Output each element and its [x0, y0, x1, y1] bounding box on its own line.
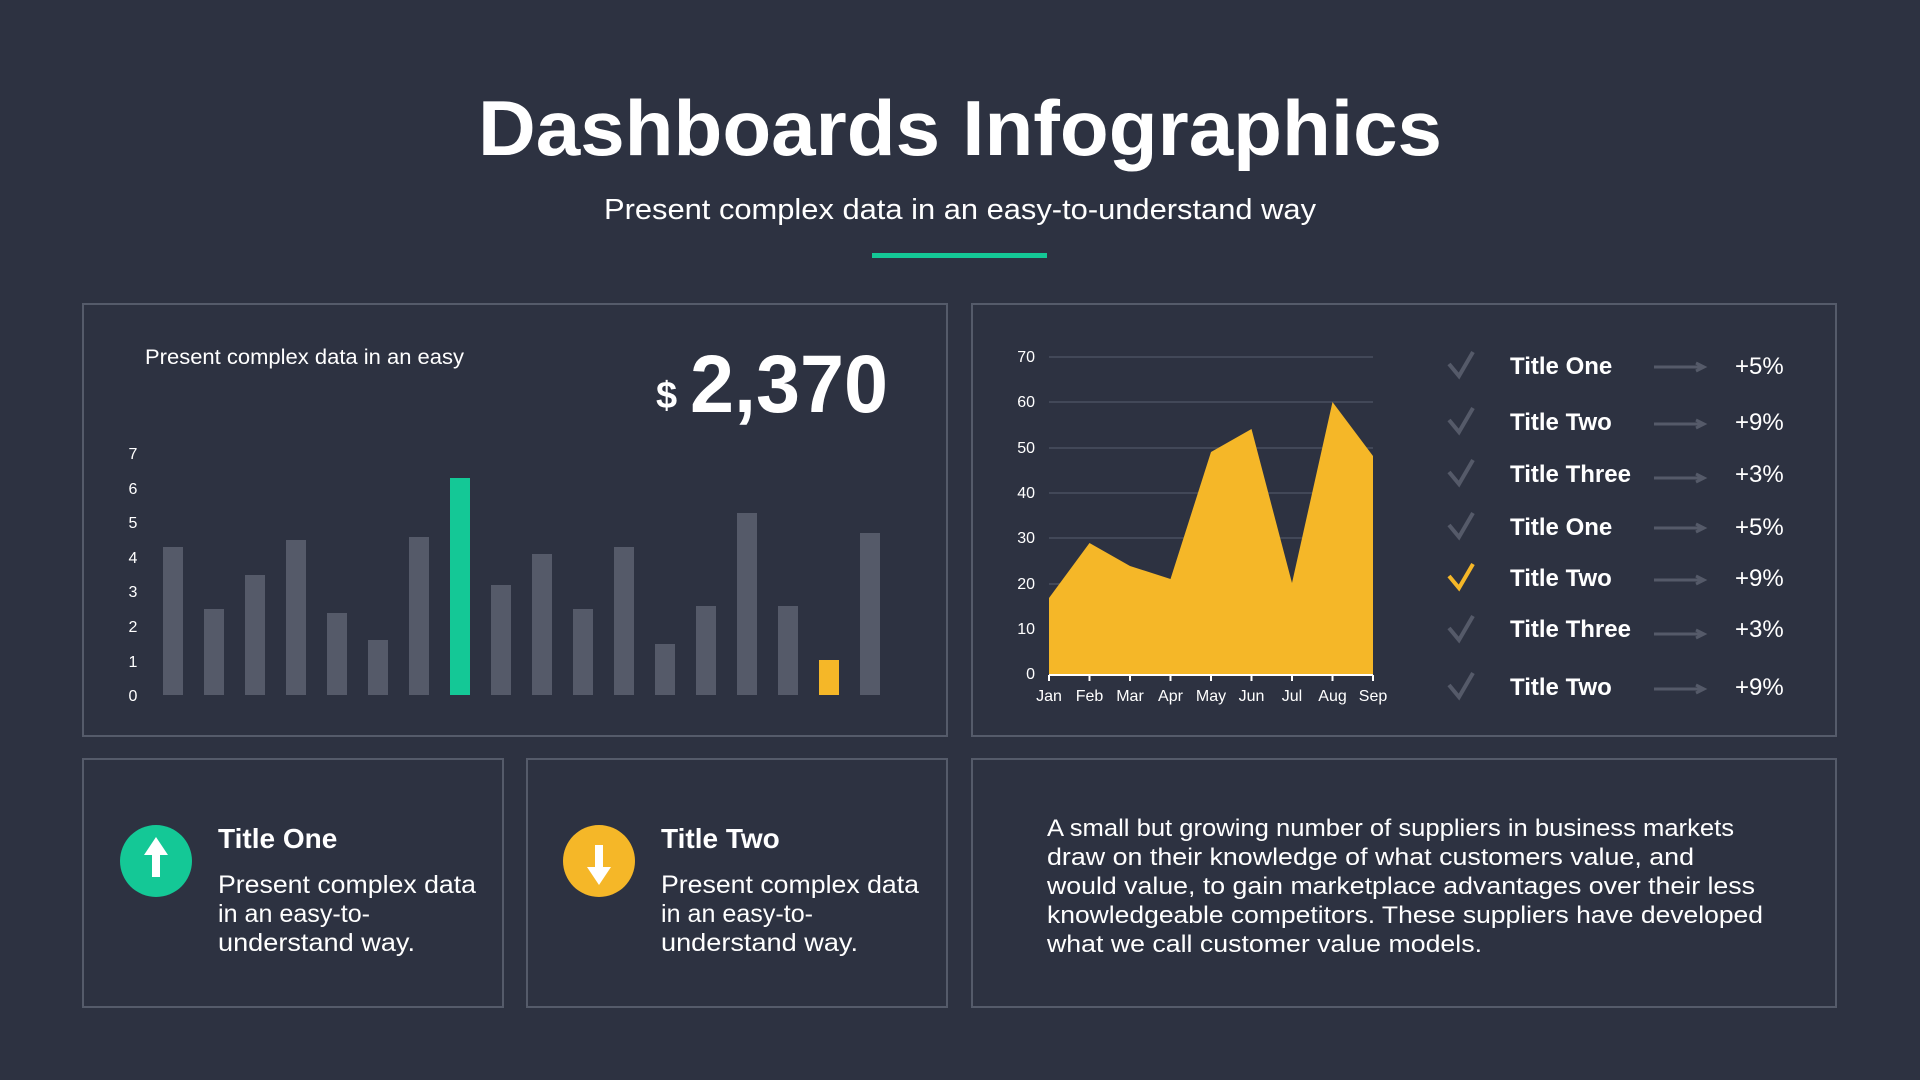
checklist: Title One	[1510, 353, 1612, 380]
panel: description: knowledgeable competitors. These suppliers have developed	[1047, 902, 1763, 929]
panel: title one	[83, 759, 503, 1007]
panel: title one: in an easy-to-	[218, 900, 370, 928]
y axis labels: 5	[129, 515, 138, 532]
panel: title two: in an easy-to-	[661, 900, 813, 928]
checklist: +9%	[1735, 409, 1784, 436]
big number: $	[656, 375, 677, 417]
panel: title one: Present complex data	[218, 871, 476, 899]
y axis labels: 7	[129, 446, 138, 463]
panel: title one: understand way.	[218, 929, 415, 957]
y axis labels: 2	[129, 619, 138, 636]
area chart: 30	[1017, 530, 1035, 547]
bar chart	[163, 478, 880, 695]
checklist	[1449, 352, 1784, 701]
panel: bar chart	[83, 304, 947, 736]
area chart: Apr	[1158, 688, 1184, 705]
area chart: 60	[1017, 394, 1035, 411]
panel: description: what we call customer value models.	[1046, 931, 1482, 958]
checklist: +9%	[1735, 674, 1784, 701]
area chart: 70	[1017, 349, 1035, 366]
area chart: Sep	[1359, 688, 1387, 705]
area chart: May	[1196, 688, 1226, 705]
title underline	[872, 253, 1047, 258]
area chart: 50	[1017, 440, 1035, 457]
checklist: +3%	[1735, 461, 1784, 488]
checklist: +5%	[1735, 514, 1784, 541]
checklist: Title One	[1510, 514, 1612, 541]
checklist: Title Two	[1510, 565, 1612, 592]
subtitle: Present complex data in an easy-to-understand way	[604, 194, 1317, 226]
panel: title one: Title One	[218, 823, 337, 854]
y axis labels	[129, 446, 138, 705]
y axis labels: 6	[129, 481, 138, 498]
title: Dashboards Infographics	[478, 84, 1442, 172]
icon: up arrow	[120, 825, 192, 897]
panel: description: A small but growing number of suppliers in business markets	[1047, 815, 1734, 842]
panel: description	[972, 759, 1836, 1007]
checklist: +3%	[1735, 616, 1784, 643]
checklist: Title Three	[1510, 461, 1631, 488]
area chart: Jan	[1036, 688, 1062, 705]
area chart: 40	[1017, 485, 1035, 502]
big number: 2,370	[690, 339, 888, 430]
area chart: 20	[1017, 576, 1035, 593]
area chart: Feb	[1076, 688, 1103, 705]
panel: title two: Title Two	[661, 823, 780, 854]
panel: title two: Present complex data	[661, 871, 919, 899]
icon: down arrow	[563, 825, 635, 897]
panel: area chart and list	[972, 304, 1836, 736]
area chart: 10	[1017, 621, 1035, 638]
area chart: 0	[1026, 666, 1035, 683]
panel: title two	[527, 759, 947, 1007]
area chart: Jun	[1239, 688, 1264, 705]
area chart: Mar	[1116, 688, 1144, 705]
checklist: +9%	[1735, 565, 1784, 592]
y axis labels: 1	[129, 654, 138, 671]
panel: description: draw on their knowledge of what customers value, and	[1047, 844, 1694, 871]
area chart: Jul	[1282, 688, 1302, 705]
y axis labels: 0	[129, 688, 138, 705]
checklist: Title Three	[1510, 616, 1631, 643]
panel: title two: understand way.	[661, 929, 858, 957]
checklist: +5%	[1735, 353, 1784, 380]
y axis labels: 3	[129, 584, 138, 601]
checklist: Title Two	[1510, 409, 1612, 436]
panel: description: would value, to gain marketplace advantages over their less	[1046, 873, 1755, 900]
panel caption: Present complex data in an easy	[145, 346, 465, 369]
checklist: Title Two	[1510, 674, 1612, 701]
area chart: Aug	[1318, 688, 1347, 705]
y axis labels: 4	[129, 550, 138, 567]
area chart	[1017, 349, 1387, 705]
